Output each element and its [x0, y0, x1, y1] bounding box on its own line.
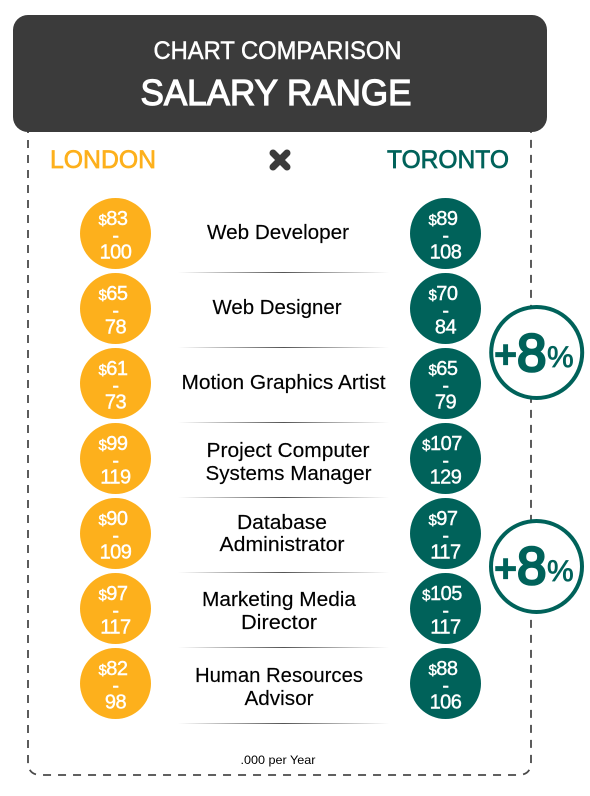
row: Motion Graphics Artist: Motion Graphics Artist: [182, 372, 386, 394]
row: Web Developer: $83: [98, 208, 128, 230]
row: Marketing Media Director: [80, 573, 481, 644]
row: Database Administrator: $97: [428, 508, 458, 530]
row: Web Developer: -: [442, 225, 449, 247]
row: Human Resources Advisor: [80, 648, 481, 719]
row: Motion Graphics Artist: $61: [98, 358, 128, 380]
row: Marketing Media Director: 117: [430, 616, 461, 638]
row: Web Developer: [80, 198, 481, 269]
row: Motion Graphics Artist: -: [112, 375, 119, 397]
icon: versus cross: [273, 153, 287, 167]
row: Web Designer: 78: [105, 316, 126, 338]
row: Motion Graphics Artist: -: [442, 375, 449, 397]
callout: +8% lower: [491, 521, 582, 612]
row: Web Designer: $70: [428, 283, 458, 305]
row: Database Administrator: 109: [100, 542, 132, 564]
row: Project Computer Systems Manager: Systems Manager: [206, 463, 372, 485]
row: Marketing Media Director: -: [112, 600, 119, 622]
row: Human Resources Advisor: Advisor: [244, 688, 314, 710]
callout: +8% lower: 8: [517, 537, 546, 596]
row: Web Designer: -: [112, 300, 119, 322]
title: chart comparison: CHART COMPARISON: [154, 37, 402, 65]
row: Marketing Media Director: $97: [98, 583, 128, 605]
row: Marketing Media Director: -: [442, 600, 449, 622]
row: Project Computer Systems Manager: Project Computer: [206, 440, 370, 462]
callout: +8% lower: +: [494, 548, 517, 590]
row: Database Administrator: $90: [98, 508, 128, 530]
dashed chart frame: [28, 125, 531, 775]
heading: London: LONDON: [50, 146, 156, 174]
row: Marketing Media Director: 117: [100, 616, 131, 638]
callout: +8% upper: 8: [517, 324, 546, 383]
row: Web Developer: 100: [100, 242, 132, 264]
row: Web Developer: 108: [430, 242, 462, 264]
row: Human Resources Advisor: -: [442, 675, 449, 697]
row: Database Administrator: Database: [237, 512, 327, 534]
row: Web Designer: -: [442, 300, 449, 322]
footnote: .000 per Year: [240, 753, 316, 767]
row: Database Administrator: [80, 498, 481, 569]
row: Human Resources Advisor: Human Resources: [195, 665, 363, 687]
callout: +8% lower: %: [547, 555, 574, 588]
row: Motion Graphics Artist: [80, 348, 481, 419]
row: Motion Graphics Artist: 79: [435, 392, 456, 414]
row: Human Resources Advisor: $82: [98, 658, 128, 680]
row: Marketing Media Director: Marketing Media: [202, 589, 357, 611]
callout: +8% upper: [491, 307, 582, 398]
heading: Toronto: TORONTO: [387, 146, 509, 174]
callout: +8% upper: %: [547, 341, 574, 374]
title banner: [13, 15, 547, 132]
row: Marketing Media Director: $105: [422, 583, 462, 605]
row: Human Resources Advisor: -: [112, 675, 119, 697]
row: Motion Graphics Artist: 73: [105, 392, 126, 414]
row: Project Computer Systems Manager: 119: [100, 466, 131, 488]
row: Human Resources Advisor: 98: [105, 692, 126, 714]
row: Database Administrator: -: [112, 525, 119, 547]
row: Database Administrator: -: [442, 525, 449, 547]
row: Project Computer Systems Manager: 129: [430, 466, 462, 488]
row: Web Designer: $65: [98, 283, 128, 305]
row: Web Developer: Web Developer: [207, 222, 349, 244]
row: Web Designer: 84: [435, 316, 456, 338]
row: Project Computer Systems Manager: $99: [98, 433, 128, 455]
row: Web Developer: -: [112, 225, 119, 247]
row: Project Computer Systems Manager: -: [442, 450, 449, 472]
row: Database Administrator: Administrator: [220, 534, 345, 556]
callout: +8% upper: +: [494, 334, 517, 376]
row: Database Administrator: 117: [430, 542, 461, 564]
row: Web Designer: Web Designer: [212, 297, 342, 319]
title: salary range: SALARY RANGE: [140, 72, 412, 113]
row: Web Developer: $89: [428, 208, 458, 230]
row: Web Designer: [80, 273, 481, 344]
row: Project Computer Systems Manager: -: [112, 450, 119, 472]
row: Human Resources Advisor: 106: [430, 692, 462, 714]
row: Project Computer Systems Manager: $107: [422, 433, 462, 455]
row: Motion Graphics Artist: $65: [428, 358, 458, 380]
row: Project Computer Systems Manager: [80, 423, 481, 494]
row: Marketing Media Director: Director: [241, 612, 317, 634]
row: Human Resources Advisor: $88: [428, 658, 458, 680]
